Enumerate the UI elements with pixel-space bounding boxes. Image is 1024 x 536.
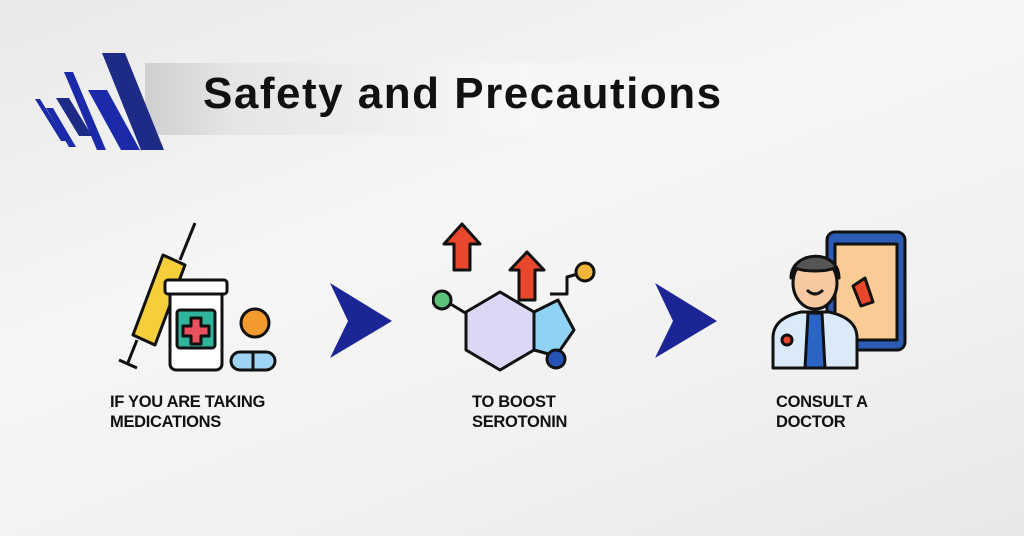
- label 2: TO BOOST: [472, 393, 555, 411]
- title: Safety and Precautions: [203, 69, 723, 118]
- label 1: MEDICATIONS: [110, 413, 221, 431]
- logo: blue bars: [35, 53, 164, 150]
- label 3: CONSULT A: [776, 393, 868, 411]
- label 1: IF YOU ARE TAKING: [110, 393, 265, 411]
- arrow 1: [330, 283, 392, 358]
- arrow 2: [655, 283, 717, 358]
- label 2: SEROTONIN: [472, 413, 567, 431]
- icon: doctor phone: [772, 230, 906, 370]
- label 3: [776, 393, 868, 431]
- icon: medications: [118, 222, 276, 372]
- title band: [145, 63, 765, 135]
- label 3: DOCTOR: [776, 413, 845, 431]
- label 1: [110, 393, 265, 431]
- label 2: [472, 393, 567, 431]
- icon: serotonin: [432, 222, 596, 372]
